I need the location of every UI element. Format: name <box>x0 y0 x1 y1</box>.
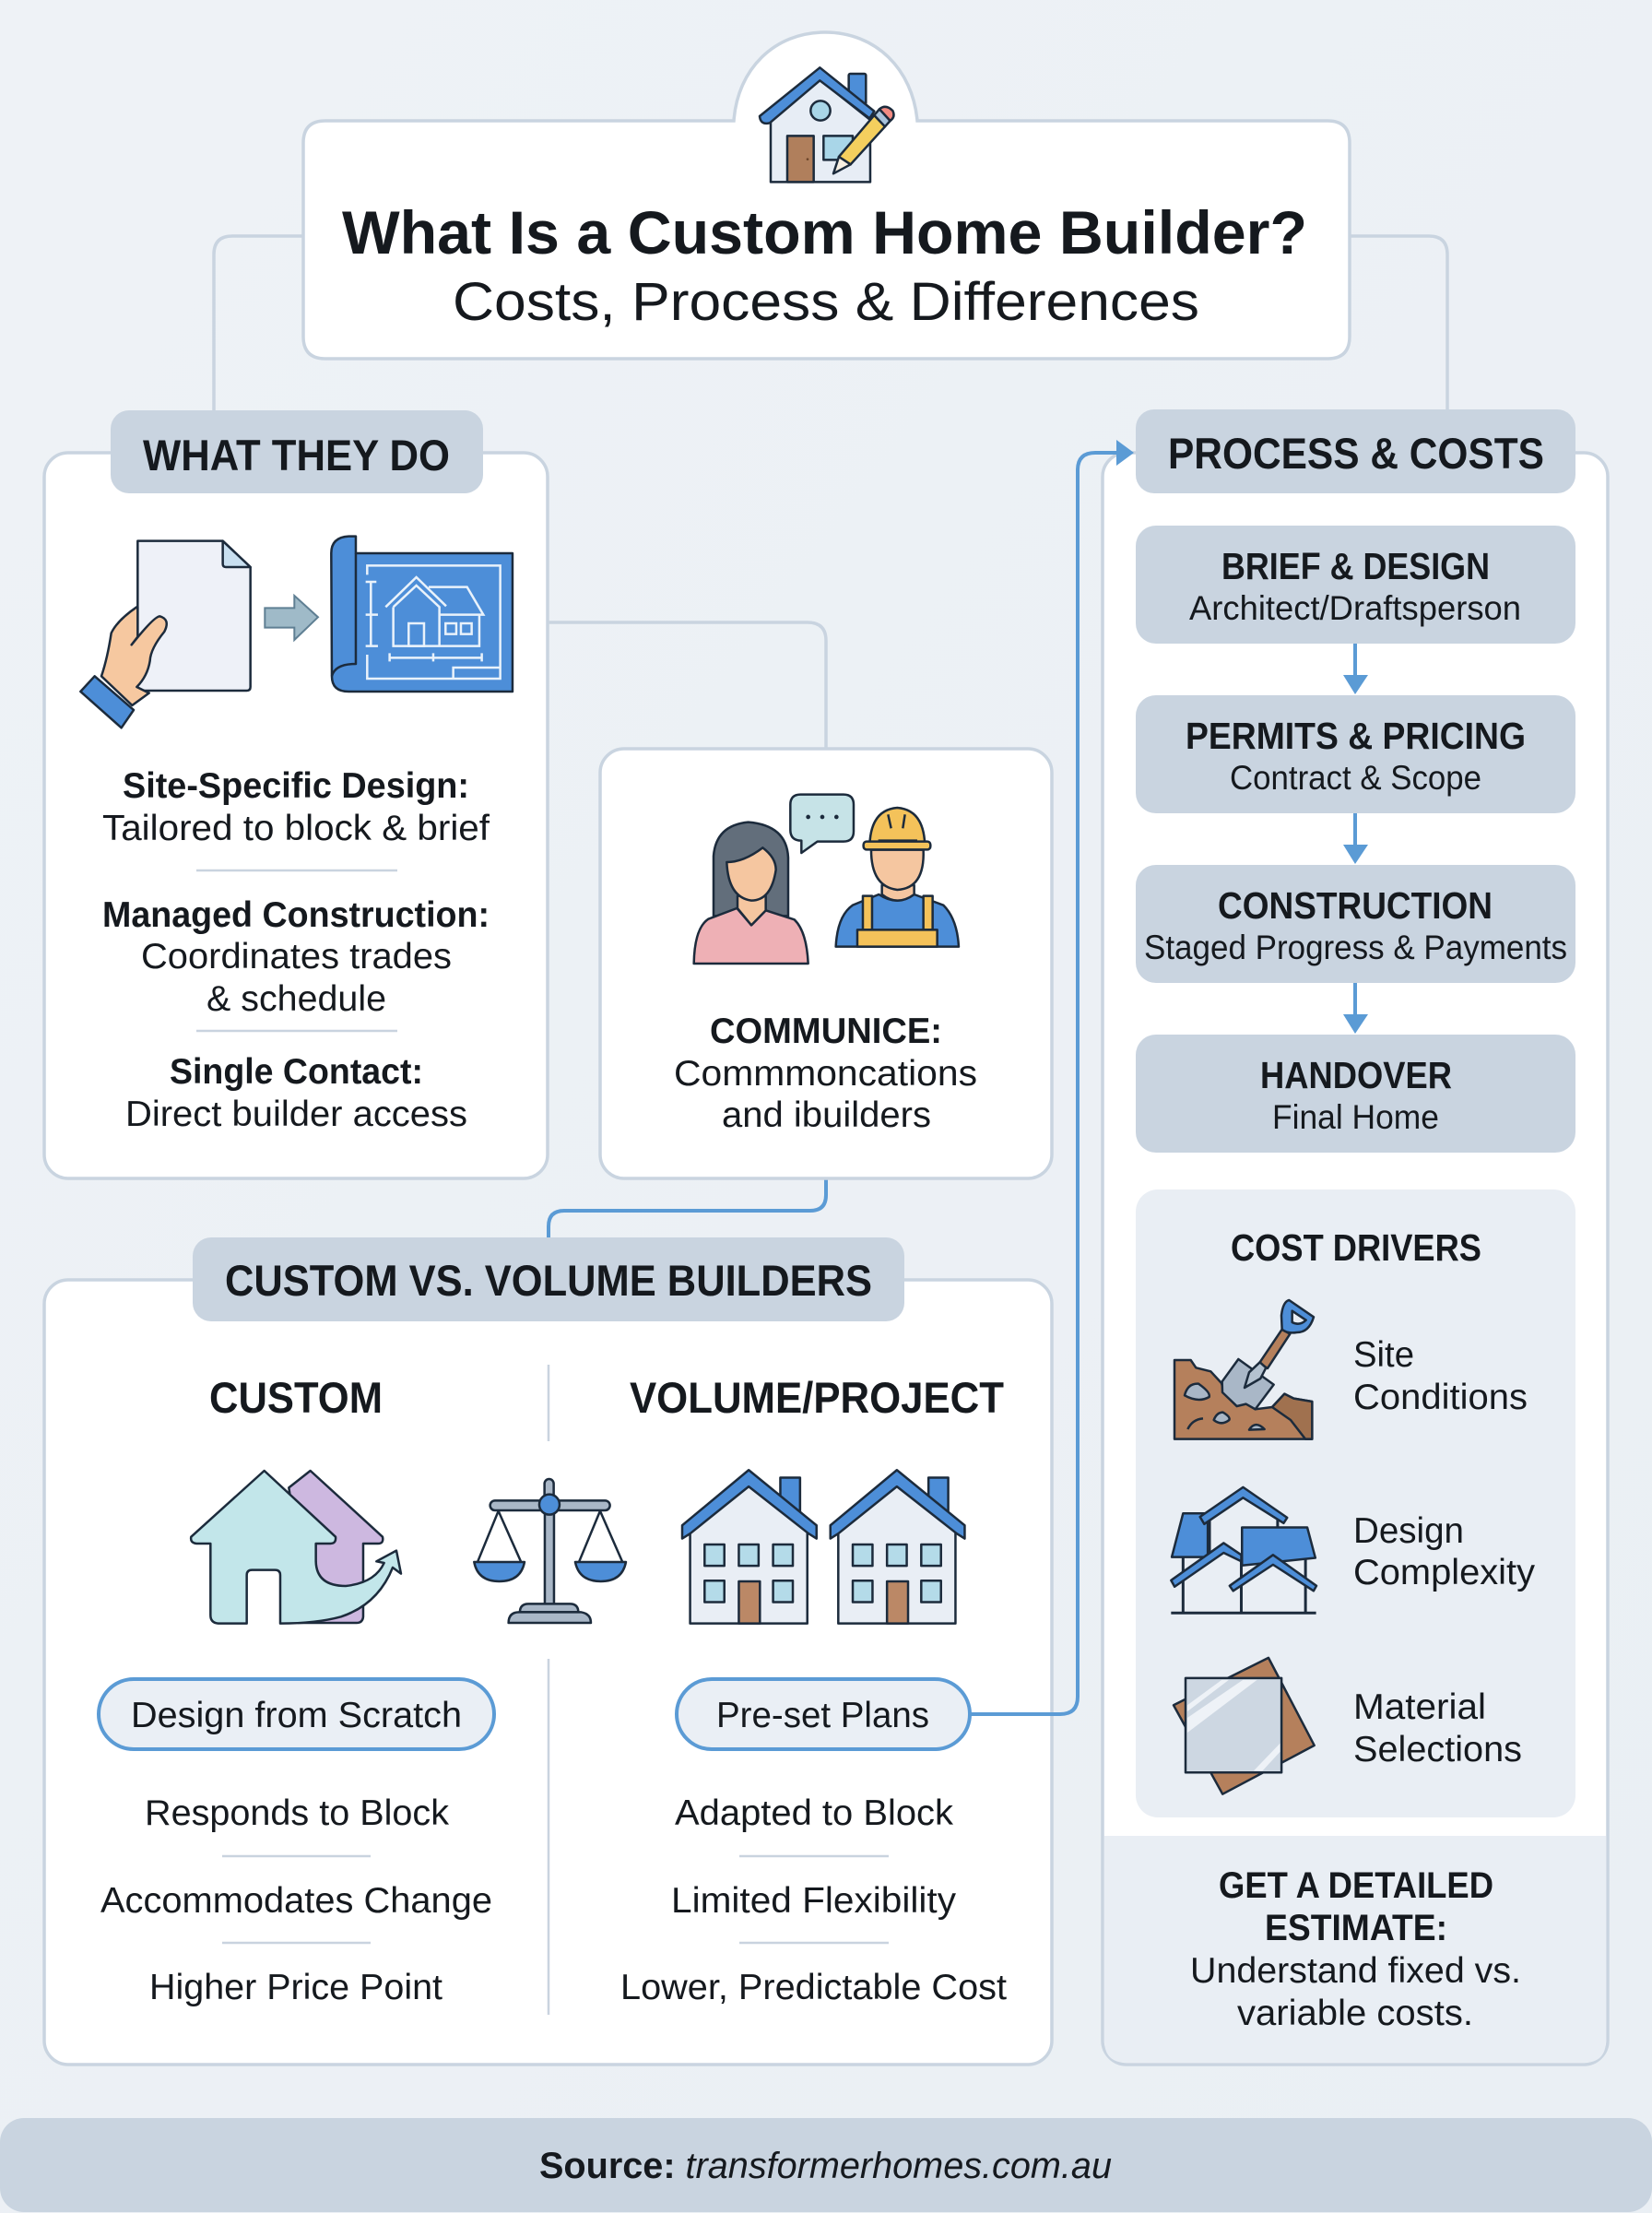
text: managed construction: & schedule <box>206 979 386 1019</box>
heading pill <box>111 410 483 493</box>
icon: hand holding document to blueprint <box>80 537 513 728</box>
connector: title to what they do <box>214 236 303 411</box>
text: site-specific design <box>102 766 490 848</box>
icon: balance scales <box>474 1479 626 1623</box>
text: get a detailed estimate <box>1190 1865 1521 2033</box>
panel: custom vs volume builders <box>44 1237 1052 2065</box>
panel card <box>600 749 1052 1178</box>
callout: pre-set plans <box>677 1679 970 1749</box>
column heading: volume/project: VOLUME/PROJECT <box>630 1373 1004 1422</box>
callout: design from scratch <box>99 1679 494 1749</box>
connector: title to process and costs <box>1350 236 1447 411</box>
panel: communication <box>600 749 1052 1178</box>
step: construction: Staged Progress & Payments <box>1144 929 1567 966</box>
arrow <box>1343 813 1368 864</box>
text: managed construction: Managed Construction: <box>102 895 490 935</box>
subheading: Costs, Process & Differences <box>453 272 1199 332</box>
panel card <box>44 1280 1052 2065</box>
left house <box>682 1470 817 1624</box>
footer: source: Source: transformerhomes.com.au <box>539 2146 1112 2186</box>
list: custom: Higher Price Point <box>149 1968 442 2007</box>
step: brief and design: BRIEF & DESIGN <box>1221 545 1490 587</box>
right house <box>831 1470 964 1624</box>
list: custom: Accommodates Change <box>100 1881 492 1921</box>
icon: complex roofs <box>1171 1487 1316 1613</box>
heading pill: PROCESS & COSTS <box>1168 429 1544 478</box>
title card shape with arch <box>303 32 1350 359</box>
list: custom <box>100 1793 492 2007</box>
text: single contact <box>125 1052 467 1134</box>
title card <box>303 32 1350 359</box>
heading pill: CUSTOM VS. VOLUME BUILDERS <box>225 1256 872 1305</box>
text: communication: and ibuilders <box>722 1095 931 1135</box>
panel card <box>44 453 548 1178</box>
list: volume: Adapted to Block <box>675 1793 953 1833</box>
panel: cost drivers <box>1136 1189 1575 1817</box>
panel: what they do <box>44 410 548 1178</box>
text: managed construction: Coordinates trades <box>141 937 452 976</box>
label: site conditions: Conditions <box>1353 1378 1528 1417</box>
text: get a detailed estimate: ESTIMATE: <box>1265 1908 1447 1948</box>
step: brief and design <box>1136 526 1575 644</box>
text: communication <box>674 1012 977 1135</box>
text: site-specific design: Tailored to block & brief <box>102 809 490 848</box>
label: material selections: Selections <box>1353 1730 1522 1769</box>
icon: house with pencil <box>760 67 894 182</box>
step: brief and design: Architect/Draftsperson <box>1189 589 1521 627</box>
icon: custom house with arrow <box>191 1471 401 1624</box>
connector: pre-set plans to process and costs <box>970 440 1134 1714</box>
list: volume: Limited Flexibility <box>671 1881 957 1921</box>
panel: process and costs <box>1103 409 1608 2065</box>
connector: what they do to communication <box>548 622 826 749</box>
label: site conditions <box>1353 1335 1528 1417</box>
column heading: custom: CUSTOM <box>209 1373 383 1422</box>
heading: What Is a Custom Home Builder? <box>342 198 1307 266</box>
text: site-specific design: Site-Specific Design: <box>123 766 469 806</box>
text: managed construction <box>102 895 490 1019</box>
list: volume: Lower, Predictable Cost <box>620 1968 1007 2007</box>
panel card <box>1103 453 1608 2065</box>
text: get a detailed estimate: variable costs. <box>1237 1994 1473 2033</box>
label: design complexity: Complexity <box>1353 1553 1536 1592</box>
text: communication: Commmoncations <box>674 1054 977 1094</box>
text: get a detailed estimate: Understand fixed vs. <box>1190 1951 1521 1991</box>
list: volume <box>620 1793 1007 2007</box>
step: construction: CONSTRUCTION <box>1218 884 1493 927</box>
cost drivers background <box>1136 1189 1575 1817</box>
step: construction <box>1136 865 1575 983</box>
estimate section background <box>1104 1836 1606 2063</box>
label: design complexity: Design <box>1353 1511 1464 1551</box>
step: permits and pricing: PERMITS & PRICING <box>1186 715 1526 757</box>
heading pill <box>1136 409 1575 493</box>
icon: client and builder talking <box>694 795 959 964</box>
label: material selections: Material <box>1353 1687 1486 1727</box>
label: material selections <box>1353 1687 1522 1769</box>
step: handover <box>1136 1035 1575 1153</box>
cost drivers heading: COST DRIVERS <box>1231 1226 1481 1269</box>
footer: source <box>0 2118 1652 2212</box>
label: site conditions: Site <box>1353 1335 1414 1375</box>
step: permits and pricing: Contract & Scope <box>1230 759 1481 797</box>
step: permits and pricing <box>1136 695 1575 813</box>
text: communication: COMMUNICE: <box>710 1012 942 1051</box>
text: single contact: Direct builder access <box>125 1095 467 1134</box>
heading pill <box>193 1237 904 1321</box>
arrow <box>1343 644 1368 694</box>
icon: material samples <box>1174 1658 1315 1794</box>
icon: shovel in soil <box>1174 1300 1314 1439</box>
text: get a detailed estimate: GET A DETAILED <box>1219 1865 1493 1906</box>
icon: two project houses <box>682 1470 964 1624</box>
label: design complexity <box>1353 1511 1536 1592</box>
heading pill: WHAT THEY DO <box>143 431 450 479</box>
arrow <box>1343 983 1368 1034</box>
callout: pre-set plans: Pre-set Plans <box>716 1696 929 1735</box>
step: handover: Final Home <box>1272 1098 1439 1136</box>
connector: communication to comparison <box>549 1178 826 1238</box>
text: single contact: Single Contact: <box>170 1052 423 1092</box>
callout: design from scratch: Design from Scratch <box>131 1696 462 1735</box>
step: handover: HANDOVER <box>1260 1054 1452 1096</box>
list: custom: Responds to Block <box>145 1793 449 1833</box>
